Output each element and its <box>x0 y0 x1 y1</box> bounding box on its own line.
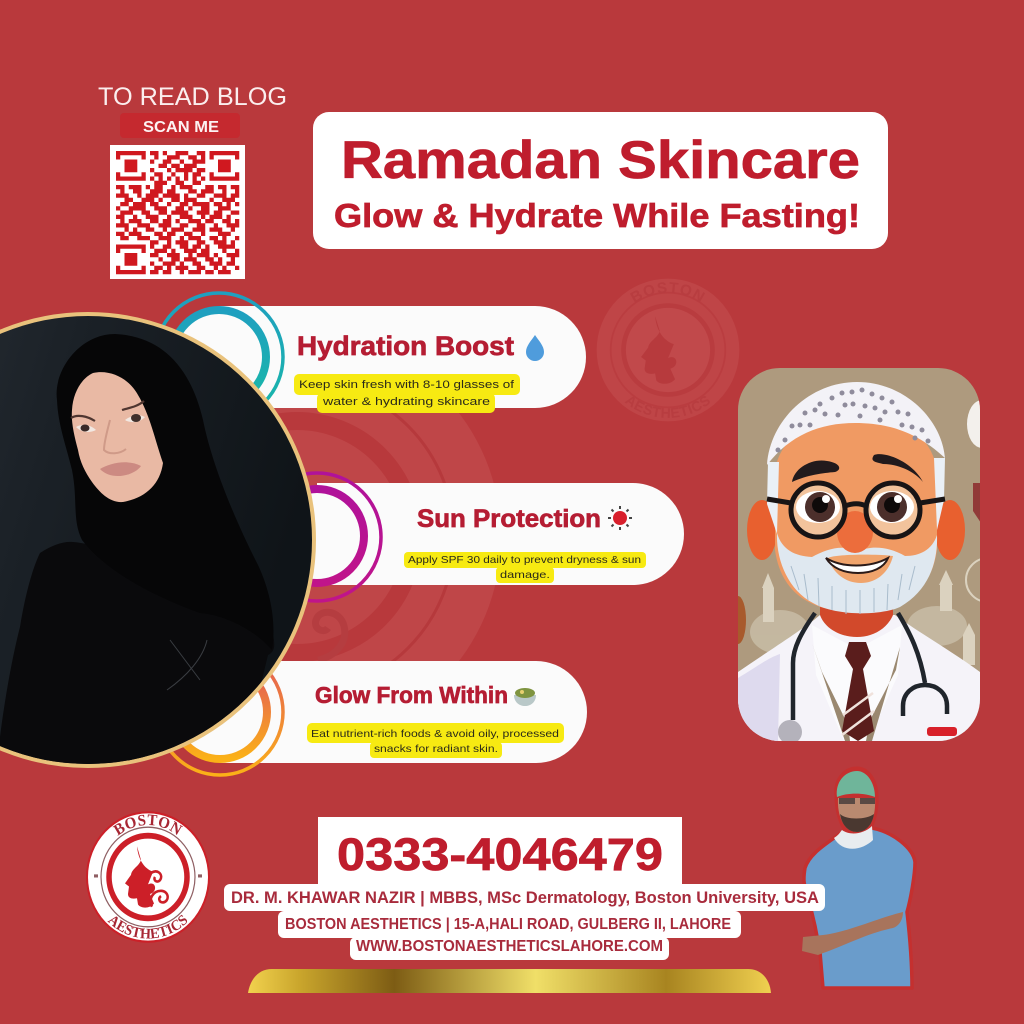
background mosques <box>750 400 980 665</box>
clinic address: BOSTON AESTHETICS | 15-A,HALI ROAD, GULBERG II, LAHORE <box>285 916 731 933</box>
white kufi cap <box>767 382 945 465</box>
icon: salad bowl <box>514 688 536 706</box>
doctor credentials <box>224 884 825 911</box>
teal rings <box>155 293 283 421</box>
website: WWW.BOSTONAESTHETICSLAHORE.COM <box>356 938 663 955</box>
scan me badge: SCAN ME <box>143 119 219 136</box>
faded logo watermark top right: BOSTON <box>632 282 704 301</box>
burger hint <box>738 596 746 644</box>
heading: Sun Protection <box>417 505 601 533</box>
photo: surgeon <box>802 768 915 988</box>
logo wordmarks: BOSTON <box>112 814 183 836</box>
beard <box>777 533 937 614</box>
stethoscope chest piece <box>778 720 802 741</box>
logo wordmarks <box>108 814 187 939</box>
logo stars <box>94 874 202 877</box>
icon: sun <box>608 506 632 530</box>
doctor credentials: DR. M. KHAWAR NAZIR | MBBS, MSc Dermatology, Boston University, USA <box>231 889 819 907</box>
highlighted description: Keep skin fresh with 8-10 glasses of <box>299 379 515 391</box>
illustration: cartoon doctor <box>738 368 980 741</box>
gold bar <box>248 969 771 993</box>
tie <box>842 642 874 741</box>
chin patch <box>828 555 893 583</box>
clinic address <box>278 911 741 938</box>
scrubs with red halo <box>804 828 915 988</box>
highlighted description: damage. <box>500 569 550 581</box>
phone box: 0333-4046479 <box>337 829 663 880</box>
face <box>72 372 163 502</box>
heading: Glow From Within <box>315 682 508 708</box>
icon: water drop <box>526 335 544 361</box>
vest strips <box>812 643 900 741</box>
phone box <box>318 817 682 887</box>
hijab <box>57 334 273 650</box>
panel: sun protection <box>253 473 684 601</box>
panel: hydration boost <box>155 293 586 421</box>
head halo <box>836 768 877 832</box>
logo: boston aesthetics <box>86 811 210 943</box>
large faded logo watermark <box>93 333 501 741</box>
highlighted description: snacks for radiant skin. <box>374 743 498 755</box>
neck <box>820 605 893 637</box>
shirt <box>812 625 902 741</box>
highlighted description: Eat nutrient-rich foods & avoid oily, processed <box>311 728 559 740</box>
blog label: TO READ BLOG <box>98 83 287 111</box>
head <box>775 420 937 612</box>
highlighted description: water & hydrating skincare <box>322 396 490 408</box>
logo face silhouette <box>125 846 155 908</box>
beard <box>840 814 874 832</box>
title: Ramadan Skincare <box>341 131 860 190</box>
robe sparkle detail <box>167 640 207 690</box>
scan me badge <box>120 113 240 138</box>
robe <box>0 542 274 770</box>
subtitle: Glow & Hydrate While Fasting! <box>334 197 860 234</box>
cap <box>837 771 875 797</box>
heading: Hydration Boost <box>297 331 514 361</box>
ears <box>747 500 965 560</box>
highlighted description <box>404 552 646 583</box>
highlighted description: Apply SPF 30 daily to prevent dryness & sun <box>408 554 641 566</box>
logo hair curls <box>150 871 168 907</box>
highlighted description <box>307 723 564 758</box>
orange rings <box>157 649 283 775</box>
highlighted description <box>294 374 520 413</box>
logo wordmarks: AESTHETICS <box>108 914 187 939</box>
arm <box>802 912 903 955</box>
smile <box>826 558 888 573</box>
magenta rings <box>253 473 381 601</box>
glasses <box>767 483 945 537</box>
faded logo watermark top right <box>597 279 739 421</box>
collar <box>834 826 873 849</box>
photo: woman in hijab <box>0 310 320 770</box>
nose <box>837 511 873 553</box>
faded logo watermark top right: AESTHETICS <box>630 398 708 418</box>
side hair <box>767 458 945 534</box>
tan backdrop <box>738 368 980 741</box>
coat <box>738 615 980 741</box>
eyebrows <box>792 454 923 482</box>
head <box>838 798 875 832</box>
title panel <box>313 112 888 249</box>
stethoscope <box>793 613 947 720</box>
panel: glow from within <box>157 649 587 775</box>
facial features <box>71 401 145 476</box>
eyes <box>796 491 914 523</box>
QR code <box>110 145 245 279</box>
glasses <box>839 798 875 804</box>
pocket pen <box>927 727 957 736</box>
